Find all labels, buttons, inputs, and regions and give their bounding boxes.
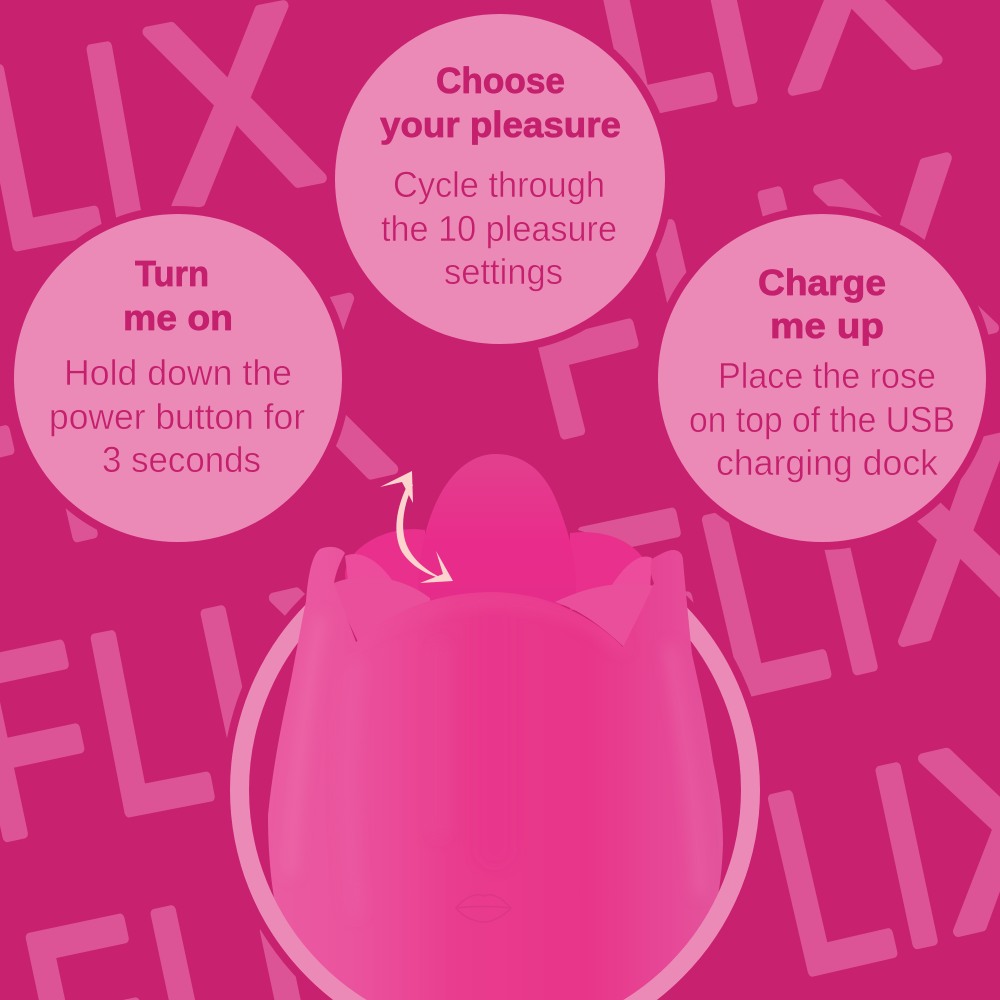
panel: charge me up — [658, 214, 986, 542]
watermark: FLIX letters scattered across the background: I — [851, 710, 962, 1000]
arrow: tongue movement — [380, 471, 453, 583]
heading: turn me on — [123, 253, 233, 338]
panel: choose your pleasure — [335, 14, 665, 344]
side petals — [334, 577, 655, 647]
ring over rose base — [240, 865, 750, 1000]
heading: choose your pleasure: your pleasure — [380, 104, 621, 145]
heading: charge me up — [758, 262, 886, 346]
ring interior backing — [222, 517, 768, 1000]
ring behind rose — [230, 605, 760, 1000]
text block: choose your pleasure instructions: Cycle through — [393, 164, 605, 205]
watermark: FLIX letters scattered across the background: I — [176, 553, 287, 844]
text block: charge me up instructions: charging dock — [716, 442, 939, 483]
text block: turn me on instructions: 3 seconds — [102, 439, 261, 480]
text block: choose your pleasure instructions: the 10 pleasure — [381, 208, 617, 249]
watermark: FLIX letters scattered across the background: L — [626, 154, 794, 457]
watermark: FLIX letters scattered across the background: I — [731, 134, 852, 424]
heading: turn me on: me on — [123, 297, 233, 338]
heading: turn me on: Turn — [135, 253, 209, 294]
heading: charge me up: me up — [770, 305, 884, 346]
text block: charge me up instructions: Place the rose — [718, 355, 936, 396]
watermark: FLIX letters scattered across the background: L — [678, 446, 846, 749]
text block: choose your pleasure instructions — [381, 164, 617, 292]
text block: turn me on instructions: power button for — [49, 396, 305, 437]
text block: turn me on instructions: Hold down the — [64, 352, 292, 393]
watermark: FLIX letters scattered across the background: I — [7, 303, 123, 594]
text block: turn me on instructions — [49, 352, 305, 480]
panel: turn me on — [14, 214, 342, 542]
heading: choose your pleasure: Choose — [436, 60, 565, 101]
text block: choose your pleasure instructions: settings — [444, 251, 563, 292]
tongue — [418, 454, 576, 610]
watermark: FLIX letters scattered across the background: X — [252, 512, 464, 826]
heading: charge me up: Charge — [758, 262, 886, 303]
flower body — [268, 547, 723, 1000]
watermark: FLIX letters scattered across the background: L — [69, 567, 227, 869]
watermark: FLIX letters scattered across the background: F — [493, 185, 675, 491]
text block: charge me up instructions: on top of the USB — [689, 399, 955, 440]
watermark: FLIX letters scattered across the background: I — [787, 436, 903, 727]
watermark: FLIX letters scattered across the background: F — [555, 457, 728, 761]
product: rose toy — [268, 454, 723, 1000]
watermark: FLIX letters scattered across the background: X — [198, 242, 410, 556]
icon: lips logo — [456, 895, 511, 922]
heading: choose your pleasure — [380, 60, 621, 145]
back petals — [345, 529, 652, 610]
text block: charge me up instructions — [689, 355, 955, 483]
